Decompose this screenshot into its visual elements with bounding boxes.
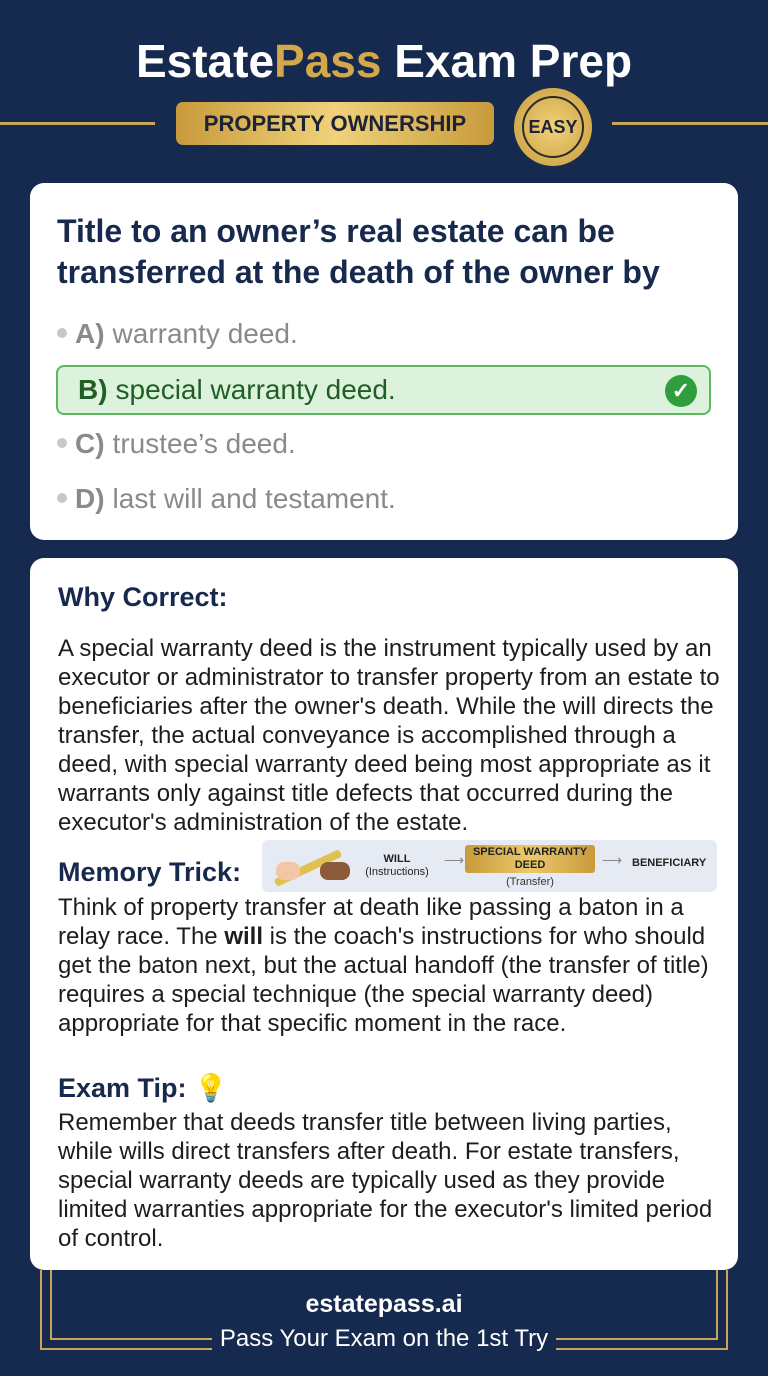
memory diagram: ⟶ (444, 852, 464, 868)
difficulty seal (514, 88, 592, 166)
footer url: estatepass.ai (305, 1290, 463, 1318)
heading: exam tip: Exam Tip: 💡 (58, 1073, 228, 1103)
explanation card (30, 558, 738, 1270)
question card (30, 183, 738, 540)
footer frame (40, 1270, 728, 1350)
memory diagram: (Transfer) (506, 876, 554, 888)
memory diagram: ⟶ (602, 852, 622, 868)
option B correct (56, 365, 711, 415)
memory diagram: BENEFICIARY (632, 857, 706, 869)
title: EstatePass Exam Prep (136, 35, 632, 87)
why correct text: A special warranty deed is the instrument typically used by an executor or administrator to transfer property from an estate to beneficiaries after the owner's death. While the will directs the transfer, the actual conveyance is accomplished through a deed, with special warranty deed being most appropriate as it warrants only against title defects that occurred during the executor's administration of the estate. (58, 635, 720, 836)
memory diagram: (Instructions) (365, 866, 429, 878)
option B correct: B) special warranty deed. (78, 374, 396, 405)
option C: C) trustee’s deed. (75, 428, 296, 459)
option D: D) last will and testament. (75, 483, 396, 514)
icon: check (665, 375, 697, 407)
memory diagram: SPECIAL WARRANTY (473, 846, 587, 858)
icon: baton hands (274, 850, 350, 886)
heading: why correct: Why Correct: (58, 582, 228, 612)
exam tip text: Remember that deeds transfer title between living parties, while wills direct transfers after death. For estate transfers, special warranty deeds are typically used as they provide limited warranties appropriate for the executor's limited period of control. (58, 1109, 712, 1252)
difficulty seal: EASY (528, 117, 578, 137)
category badge: PROPERTY OWNERSHIP (204, 111, 466, 136)
gold lines (0, 122, 155, 125)
category badge (176, 102, 494, 145)
icon: check: ✓ (672, 378, 690, 403)
question text: Title to an owner’s real estate can be transferred at the death of the owner by (57, 213, 660, 290)
memory trick text: Think of property transfer at death like passing a baton in a relay race. The will is the coach's instructions for who should get the baton next, but the actual handoff (the transfer of title) requires a special technique (the special warranty deed) appropriate for that specific moment in the race. (58, 894, 709, 1037)
memory diagram: WILL (384, 853, 410, 865)
heading: memory trick: Memory Trick: (58, 857, 241, 887)
option A: A) warranty deed. (75, 318, 298, 349)
memory diagram: DEED (515, 859, 545, 871)
footer tagline: Pass Your Exam on the 1st Try (220, 1325, 548, 1352)
memory diagram (262, 840, 717, 892)
